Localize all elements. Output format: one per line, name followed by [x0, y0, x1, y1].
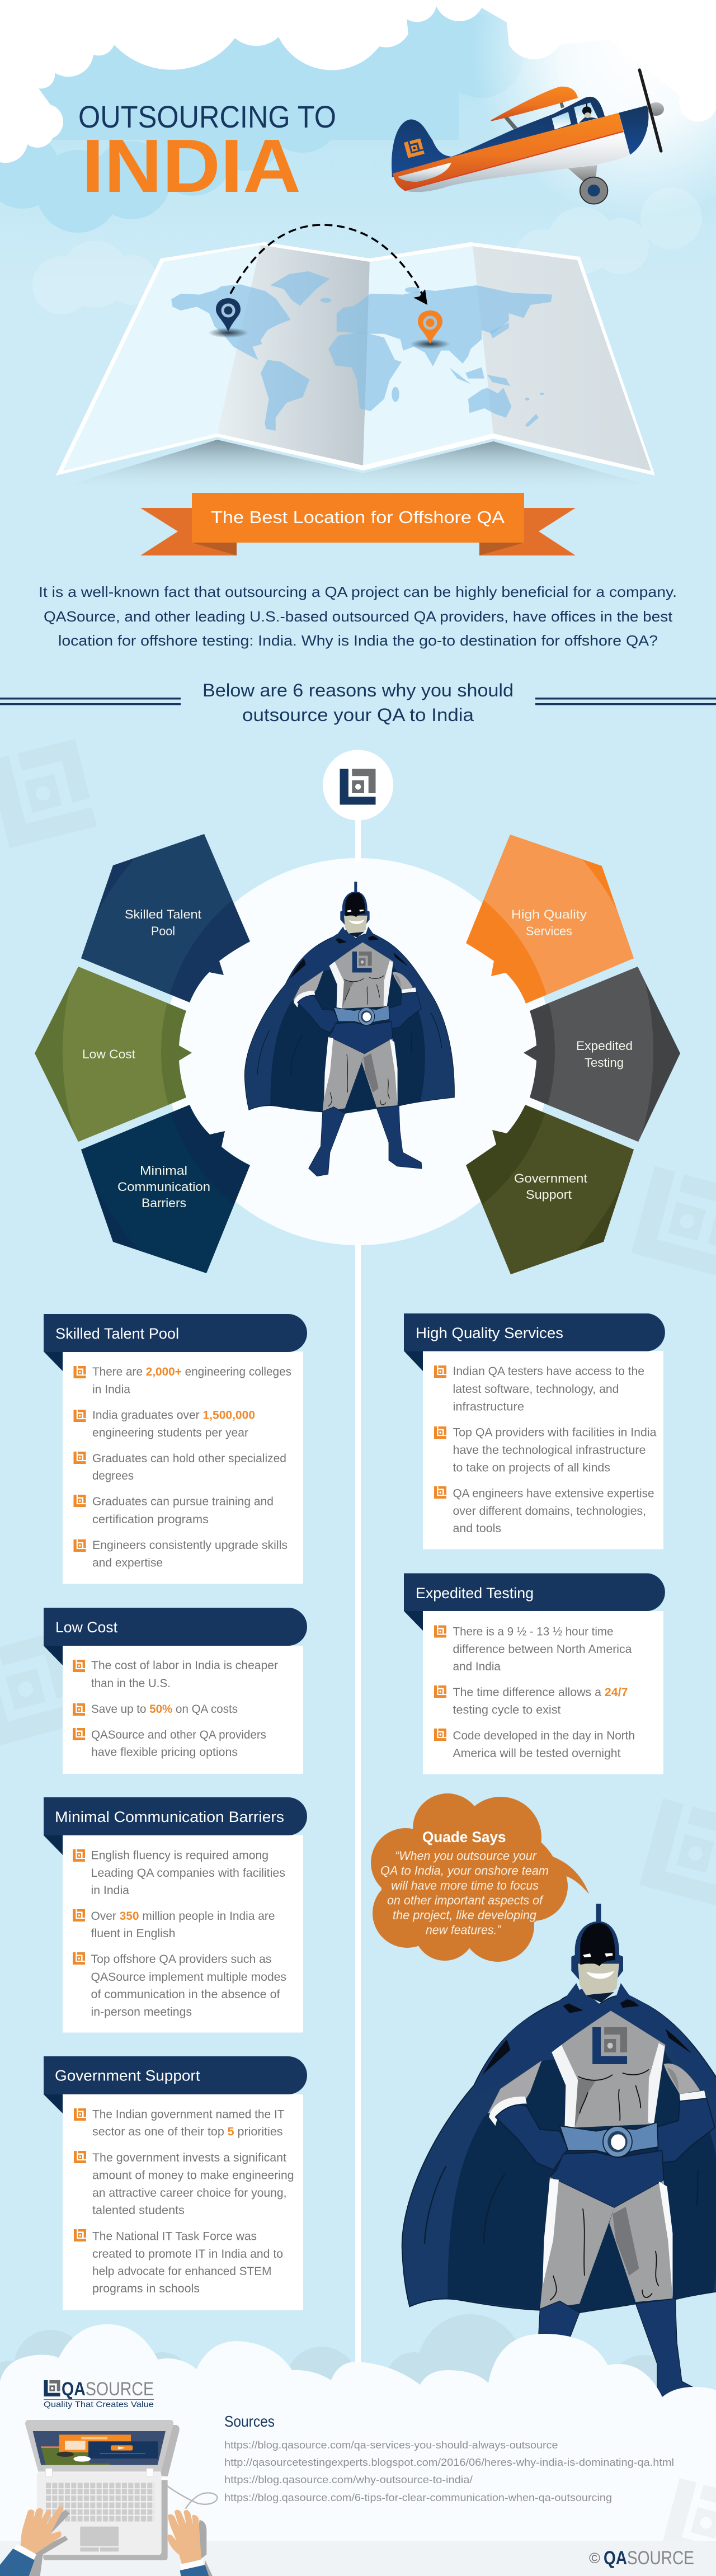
panel: Low Cost hexagon: Low Cost	[82, 1047, 135, 1061]
heading: Low Cost	[55, 1619, 117, 1636]
copyright: ©	[589, 2550, 600, 2566]
intro paragraph	[39, 583, 677, 649]
sky background with clouds	[0, 0, 716, 314]
callout: Quade Says speech bubble: on other important aspects of	[387, 1893, 544, 1908]
panel: Expedited Testing hexagon: Expedited	[576, 1039, 633, 1053]
heading	[44, 1797, 307, 1835]
logo badge	[323, 750, 393, 820]
heading	[404, 1313, 665, 1351]
callout: Quade Says speech bubble: QA to India, your onshore team	[380, 1864, 549, 1877]
bullet list: and expertise	[92, 1556, 163, 1570]
panel: Government Support hexagon	[466, 1105, 634, 1274]
bullet list: help advocate for enhanced STEM	[92, 2265, 272, 2278]
map pin: India	[410, 310, 450, 349]
bullet list: in-person meetings	[91, 2006, 192, 2018]
bullet list: The cost of labor in India is cheaper	[91, 1659, 278, 1672]
bullet list: The National IT Task Force was	[92, 2230, 257, 2243]
bullet list: fluent in English	[91, 1927, 176, 1940]
heading	[404, 1573, 665, 1611]
QASource logo: QASOURCE	[62, 2379, 154, 2400]
panel: Skilled Talent Pool hexagon	[81, 834, 250, 1002]
bullet list: to take on projects of all kinds	[453, 1461, 610, 1475]
map pin: North America	[208, 298, 248, 338]
subheading with double rules: Below are 6 reasons why you should	[202, 680, 514, 700]
heading: Expedited Testing	[416, 1585, 534, 1602]
title	[78, 99, 336, 208]
panel: Skilled Talent Pool hexagon: Pool	[151, 924, 175, 938]
panel: Skilled Talent Pool hexagon: Skilled Talent	[125, 907, 201, 921]
panel: Expedited Testing hexagon	[524, 967, 680, 1142]
bullet list: of communication in the absence of	[91, 1988, 280, 2001]
bullet list: programs in schools	[92, 2282, 200, 2295]
bullet list: latest software, technology, and	[453, 1383, 619, 1396]
footer band	[0, 2541, 716, 2576]
pilot	[579, 103, 597, 123]
bullet list: amount of money to make engineering	[92, 2169, 294, 2182]
bullet list: America will be tested overnight	[453, 1747, 621, 1760]
bullet list: QA engineers have extensive expertise	[453, 1487, 654, 1500]
bullet list: There are 2,000+ engineering colleges	[92, 1365, 291, 1378]
intro paragraph: QASource, and other leading U.S.-based outsourced QA providers, have offices in the best	[44, 608, 673, 625]
bullet list: certification programs	[92, 1513, 209, 1526]
bullet list: degrees	[92, 1470, 134, 1482]
sources list: https://blog.qasource.com/why-outsource-to-india/	[224, 2474, 473, 2485]
bullet list	[74, 2108, 294, 2295]
watermark logo bottom	[661, 2478, 716, 2567]
panel: Skilled Talent Pool	[44, 1314, 307, 1584]
bullet list: Save up to 50% on QA costs	[91, 1703, 238, 1716]
bullet list: Graduates can hold other specialized	[92, 1452, 286, 1465]
panel: Minimal Communication Barriers hexagon: Minimal	[140, 1164, 187, 1178]
bullet list: have flexible pricing options	[91, 1746, 238, 1759]
bullet list: Indian QA testers have access to the	[453, 1365, 644, 1378]
bullet list: have the technological infrastructure	[453, 1444, 646, 1457]
panel: Minimal Communication Barriers hexagon: Communication	[117, 1180, 210, 1194]
bullet list: There is a 9 ½ - 13 ½ hour time	[453, 1626, 613, 1638]
keyboard	[46, 2485, 154, 2519]
bullet list: than in the U.S.	[91, 1677, 171, 1690]
vertical centre line	[355, 1244, 361, 2363]
bullet list	[434, 1365, 657, 1535]
bullet list	[73, 1849, 286, 2018]
bullet list: testing cycle to exist	[453, 1704, 561, 1716]
bullet list: and India	[453, 1660, 501, 1673]
sources list	[224, 2413, 674, 2503]
bullet list: India graduates over 1,500,000	[92, 1409, 255, 1422]
QASource logo: Quality That Creates Value	[44, 2400, 154, 2409]
bullet list	[73, 1659, 278, 1759]
title: OUTSOURCING TO	[78, 99, 336, 134]
bullet list: and tools	[453, 1522, 501, 1535]
subheading with double rules	[0, 680, 716, 725]
icon: airplane	[392, 70, 664, 204]
intro paragraph: It is a well-known fact that outsourcing a QA project can be highly beneficial for a company.	[39, 583, 677, 600]
bullet list: Leading QA companies with facilities	[91, 1867, 285, 1880]
bullet list	[74, 1365, 291, 1570]
watermark logos	[0, 739, 716, 1908]
bullet list	[434, 1626, 635, 1760]
panel: Low Cost hexagon	[35, 967, 192, 1142]
bullet list: The government invests a significant	[92, 2151, 286, 2164]
callout: Quade Says speech bubble: will have more time to focus	[391, 1878, 539, 1892]
callout: Quade Says speech bubble: the project, like developing	[393, 1908, 537, 1922]
sources list: https://blog.qasource.com/6-tips-for-clear-communication-when-qa-outsourcing	[224, 2492, 612, 2503]
heading: Government Support	[55, 2068, 200, 2084]
bullet list: difference between North America	[453, 1643, 632, 1656]
sources list: http://qasourcetestingexperts.blogspot.com/2016/06/heres-why-india-is-dominating-qa.html	[224, 2457, 674, 2468]
panel: High Quality Services hexagon: High Quality	[511, 907, 587, 921]
vertical connector line	[355, 817, 361, 861]
heading	[44, 1314, 307, 1352]
bullet list: in India	[91, 1884, 129, 1897]
title: INDIA	[82, 124, 301, 208]
bullet list: sector as one of their top 5 priorities	[92, 2126, 282, 2138]
arrow: dashed flight path	[230, 225, 427, 305]
panel: Expedited Testing	[404, 1573, 665, 1774]
bottom back clouds	[0, 2314, 677, 2422]
bullet list: Top QA providers with facilities in India	[453, 1426, 657, 1439]
callout: Quade Says speech bubble: new features.”	[426, 1923, 502, 1937]
bullet list: Top offshore QA providers such as	[91, 1953, 272, 1966]
heading: Skilled Talent Pool	[55, 1325, 179, 1342]
bottom white cloud	[0, 2324, 716, 2576]
QASource logo	[44, 2379, 154, 2409]
panel: Minimal Communication Barriers hexagon: Barriers	[142, 1196, 186, 1210]
panel: Minimal Communication Barriers hexagon	[81, 1105, 250, 1273]
sources list: https://blog.qasource.com/qa-services-you-should-always-outsource	[224, 2440, 558, 2451]
icon: large superhero mascot	[402, 1904, 716, 2424]
panel: Expedited Testing hexagon: Testing	[585, 1056, 624, 1070]
intro paragraph: location for offshore testing: India. Why is India the go-to destination for offshore QA?	[58, 632, 658, 649]
bullet list: QASource and other QA providers	[91, 1729, 266, 1741]
panel: Minimal Communication Barriers	[44, 1797, 307, 2033]
big white circle	[164, 858, 552, 1245]
bullet list: created to promote IT in India and to	[92, 2248, 283, 2261]
subheading with double rules: outsource your QA to India	[242, 705, 474, 725]
bullet list: English fluency is required among	[91, 1849, 268, 1862]
world continents	[171, 271, 552, 431]
copyright: QASOURCE	[604, 2547, 694, 2569]
heading	[44, 1608, 307, 1646]
icon: laptop with hands	[0, 2420, 217, 2576]
icon: superhero mascot	[244, 882, 454, 1176]
bullet list: Engineers consistently upgrade skills	[92, 1539, 288, 1552]
folded world map	[56, 242, 655, 475]
banner text: The Best Location for Offshore QA	[211, 507, 505, 527]
callout: Quade Says speech bubble	[371, 1793, 589, 1962]
panel: Low Cost	[44, 1608, 307, 1774]
bullet list: Code developed in the day in North	[453, 1730, 635, 1742]
bullet list: in India	[92, 1383, 130, 1396]
panel: High Quality Services hexagon	[466, 835, 634, 1004]
heading: High Quality Services	[416, 1325, 563, 1341]
bullet list: an attractive career choice for young,	[92, 2187, 286, 2200]
panel: Government Support hexagon: Government	[514, 1171, 587, 1185]
bullet list: engineering students per year	[92, 1426, 248, 1439]
callout: Quade Says speech bubble: “When you outsource your	[395, 1849, 538, 1863]
callout: Quade Says speech bubble: Quade Says	[422, 1829, 506, 1845]
banner ribbon	[140, 493, 576, 555]
panel: Government Support	[44, 2056, 307, 2310]
heading: Minimal Communication Barriers	[55, 1809, 284, 1825]
top white cloud	[0, 0, 716, 163]
heading	[44, 2056, 307, 2094]
bullet list: infrastructure	[453, 1401, 524, 1413]
panel: Government Support hexagon: Support	[526, 1188, 572, 1202]
sources list: Sources	[224, 2413, 275, 2430]
panel: High Quality Services	[404, 1313, 665, 1550]
bullet list: Graduates can pursue training and	[92, 1495, 274, 1508]
panel: High Quality Services hexagon: Services	[526, 924, 572, 938]
bullet list: QASource implement multiple modes	[91, 1971, 286, 1984]
bullet list: The Indian government named the IT	[92, 2108, 285, 2121]
bullet list: Over 350 million people in India are	[91, 1910, 275, 1923]
map shadow	[73, 440, 643, 495]
bullet list: over different domains, technologies,	[453, 1505, 646, 1518]
bullet list: talented students	[92, 2204, 185, 2217]
bullet list: The time difference allows a 24/7	[453, 1686, 628, 1699]
